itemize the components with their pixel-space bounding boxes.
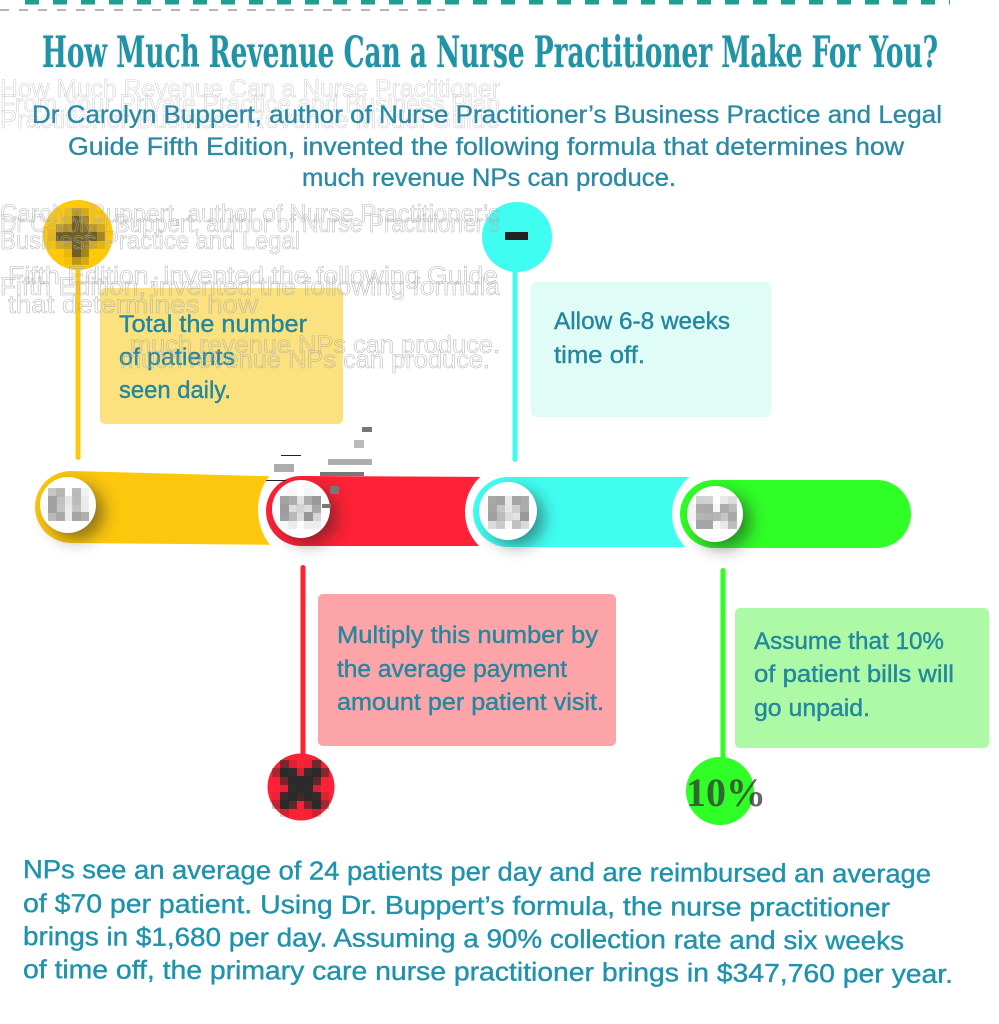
callout text: [554, 308, 730, 369]
small stray artifacts near timeline: [266, 427, 372, 508]
subtitle: Guide Fifth Edition, invented the following formula that determines how: [68, 133, 905, 161]
ghost text behind subtitle: From Your Private Practice and Business Plan: [0, 90, 500, 118]
callout text: Allow 6-8 weeks: [554, 308, 730, 335]
ghost text overlay: Fifth Edition, invented the following formula: [0, 273, 500, 301]
callout text: amount per patient visit.: [337, 689, 604, 716]
callout text: [337, 622, 604, 716]
stem: [300, 565, 306, 760]
stem: [720, 568, 726, 763]
segment 01 yellow: [35, 471, 300, 545]
ghost text overlay: Carolyn Buppert, author of Nurse Practitioner’s: [0, 200, 500, 228]
gap ring 03: [465, 464, 561, 560]
callout text: time off.: [554, 342, 645, 369]
segment 04 green: [680, 480, 911, 548]
callout text: the average payment: [337, 656, 567, 683]
ghost text behind subtitle: How Much Revenue Can a Nurse Practitioner: [0, 75, 500, 103]
ghost text overlay: [0, 200, 500, 374]
callout text: of patients: [119, 344, 235, 371]
stem: [76, 240, 80, 460]
panel: step 4 green: [686, 568, 989, 825]
plus sign: [55, 213, 101, 260]
summary paragraph: of time off, the primary care nurse practitioner brings in $347,760 per year.: [23, 954, 953, 989]
callout box: [100, 288, 343, 424]
node 03: [479, 482, 537, 540]
gap ring 04: [672, 466, 768, 562]
summary paragraph: NPs see an average of 24 patients per day and are reimbursed an average: [23, 854, 931, 889]
plus badge: [43, 200, 113, 270]
node shadows: [48, 484, 751, 549]
callout text: Total the number: [119, 311, 307, 338]
percent label: 10%: [686, 770, 766, 815]
callout box: [735, 608, 989, 748]
minus badge: [482, 202, 552, 272]
summary paragraph: of $70 per patient. Using Dr. Buppert’s formula, the nurse practitioner: [23, 888, 890, 923]
ghost text overlay: Fifth Edition, invented the following Guide: [8, 262, 498, 290]
ghost text overlay: Dr Carolyn Buppert, author of Nurse Practitioner’s: [0, 210, 500, 238]
callout text: Assume that 10%: [754, 628, 944, 655]
multiply badge: [268, 754, 334, 820]
callout box: [531, 282, 771, 417]
multiply sign: [281, 767, 321, 807]
callout text: seen daily.: [119, 377, 231, 404]
summary paragraph: brings in $1,680 per day. Assuming a 90% collection rate and six weeks: [23, 921, 904, 956]
panel: step 1 yellow: [43, 200, 343, 460]
callout text: of patient bills will: [754, 661, 954, 688]
callout box: [318, 594, 616, 746]
callout text: go unpaid.: [754, 695, 870, 722]
ghost text behind subtitle: [0, 75, 500, 134]
ghost text behind subtitle: Practitioner Business Revenue Model Guide: [0, 106, 500, 134]
node 01: [40, 477, 96, 533]
node 03: 03: [487, 491, 529, 533]
callout text: [119, 311, 307, 404]
node 04: 04: [694, 494, 736, 536]
gap ring 02: [258, 453, 372, 567]
stem: [512, 245, 518, 462]
ghost text overlay: that determines how: [8, 291, 259, 319]
ghost text overlay: much revenue NPs can produce.: [120, 346, 490, 374]
minus sign: [505, 232, 528, 240]
subtitle: [32, 101, 942, 192]
panel: step 3 cyan: [482, 202, 771, 462]
segment 03 cyan: [473, 477, 710, 547]
segment 02 red: [266, 476, 500, 546]
summary paragraph: [23, 854, 953, 989]
node 01: 01: [47, 485, 89, 527]
ghost text overlay: Business Practice and Legal: [0, 227, 300, 255]
callout text: Multiply this number by: [337, 622, 598, 649]
subtitle: much revenue NPs can produce.: [302, 164, 676, 192]
node 04: [687, 486, 743, 542]
panel: step 2 red: [268, 565, 616, 820]
callout text: [754, 628, 954, 722]
subtitle: Dr Carolyn Buppert, author of Nurse Practitioner’s Business Practice and Legal: [32, 101, 942, 129]
ghost text overlay: much revenue NPs can produce.: [130, 331, 500, 359]
top dashed border: [0, 2, 950, 10]
timeline bar: [35, 453, 911, 567]
percent badge: [686, 757, 754, 825]
node 02: [272, 480, 330, 538]
node 02: 02: [280, 489, 322, 531]
